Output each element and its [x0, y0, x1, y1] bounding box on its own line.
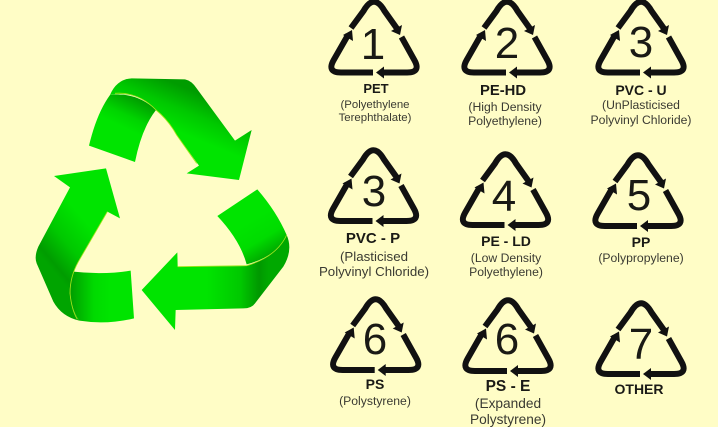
- code 2: PE-HD: [464, 2, 550, 128]
- code 4: PE-LD: Polyethylene): [469, 265, 543, 279]
- code 3: PVC-U: (UnPlasticised: [602, 98, 680, 112]
- code 3: PVC-U: PVC - U: [615, 82, 667, 98]
- code 3: PVC-P: PVC - P: [346, 230, 400, 247]
- code 1: PET: [331, 2, 417, 124]
- code 5: PP: (Polypropylene): [598, 251, 684, 265]
- code 6: PS: PS: [366, 376, 384, 392]
- code 6: PS: [333, 299, 418, 408]
- code 6: PS-E: 6: [495, 315, 519, 364]
- code 6: PS-E: Polystyrene): [470, 412, 546, 427]
- code 7: OTHER: 7: [629, 320, 653, 369]
- code 3: PVC-P: 3: [362, 167, 386, 216]
- code 3: PVC-P: (Plasticised: [340, 249, 408, 264]
- code 3: PVC-U: 3: [629, 18, 653, 67]
- code 1: PET: Terephthalate): [339, 112, 412, 124]
- code 5: PP: 5: [627, 171, 651, 220]
- code 2: PE-HD: Polyethylene): [468, 114, 542, 128]
- code 3: PVC-P: [319, 150, 429, 279]
- left arrow: [36, 168, 134, 322]
- code 7: OTHER: [598, 303, 684, 397]
- code 4: PE-LD: PE - LD: [481, 233, 531, 249]
- code 1: PET: PET: [363, 81, 389, 96]
- code 2: PE-HD: 2: [495, 19, 519, 68]
- code 6: PS: 6: [363, 315, 387, 364]
- right arrow: [142, 189, 289, 330]
- code 4: PE-LD: (Low Density: [471, 251, 542, 265]
- code 6: PS-E: (Expanded: [475, 396, 541, 411]
- code 2: PE-HD: (High Density: [468, 100, 542, 114]
- code 1: PET: (Polyethylene: [340, 99, 410, 111]
- code 7: OTHER: OTHER: [614, 381, 664, 397]
- code 6: PS: (Polystyrene): [339, 394, 411, 408]
- code 4: PE-LD: [463, 154, 548, 279]
- code 4: PE-LD: 4: [492, 172, 516, 221]
- code 3: PVC-P: Polyvinyl Chloride): [319, 264, 429, 279]
- top arrow: [89, 78, 252, 180]
- code 5: PP: PP: [632, 234, 650, 250]
- code 2: PE-HD: PE-HD: [480, 83, 526, 99]
- code 3: PVC-U: Polyvinyl Chloride): [591, 113, 691, 127]
- code 5: PP: [595, 155, 684, 265]
- code 6: PS-E: PS - E: [486, 378, 530, 395]
- code 3: PVC-U: [591, 2, 691, 127]
- icon: green recycling symbol: [36, 78, 289, 330]
- code 1: PET: 1: [361, 20, 385, 69]
- code 6: PS-E: [465, 300, 551, 427]
